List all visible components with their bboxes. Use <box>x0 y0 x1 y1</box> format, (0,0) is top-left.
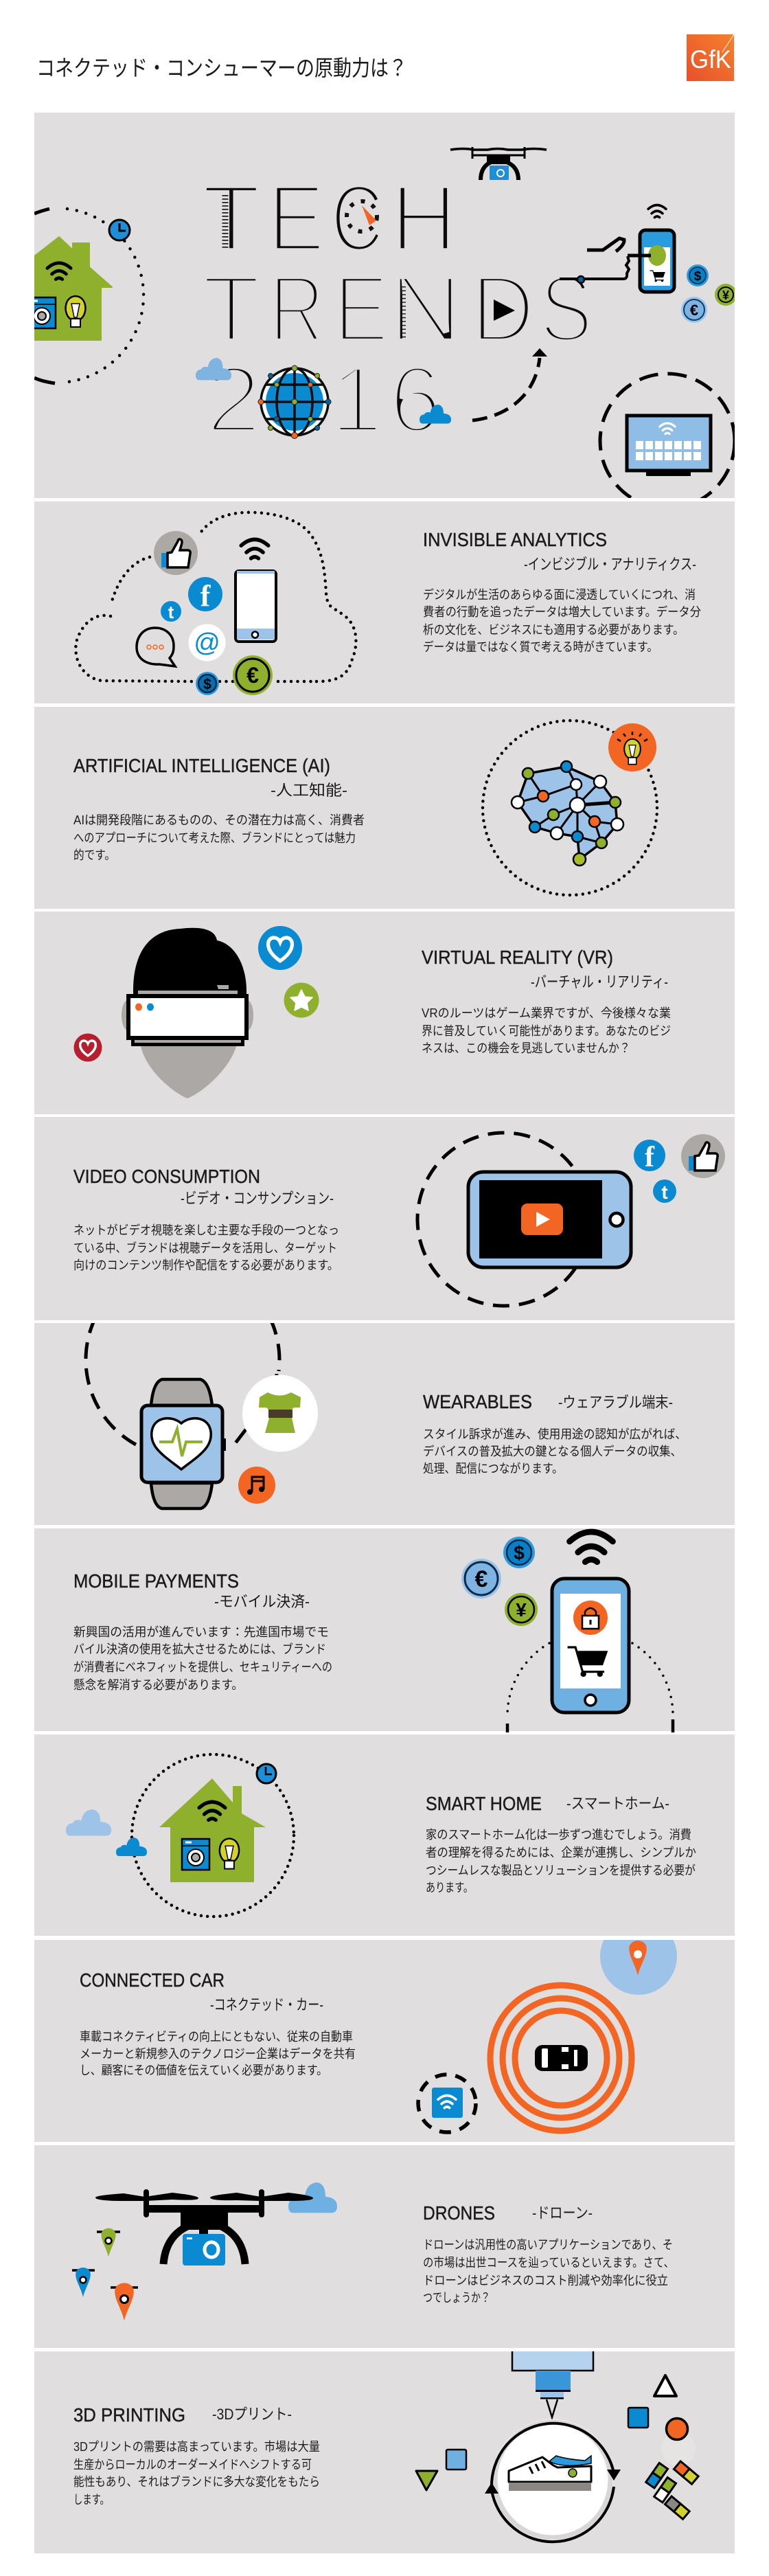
hero title: TECH TRENDS 2016: C <box>331 166 384 271</box>
icon: house <box>28 237 112 340</box>
icon: mini drone blue <box>72 2268 95 2297</box>
heading: VIRTUAL REALITY (VR) <box>422 947 613 968</box>
body text: メーカーと新規参入のテクノロジー企業はデータを共有 <box>80 2047 356 2061</box>
icon: tumblr: t <box>661 1182 668 1203</box>
icon: thumb <box>154 531 198 575</box>
icon: car <box>535 2045 588 2071</box>
icon: shoe <box>509 2456 591 2491</box>
subheading: -インビジブル・アナリティクス- <box>524 556 696 573</box>
icon: yen coin: ¥ <box>722 289 729 302</box>
icon: phone with video <box>468 1172 631 1267</box>
dotted circle left <box>34 209 144 383</box>
panel: hero <box>28 113 737 508</box>
icon: cloud light <box>66 1809 111 1835</box>
arrow: dashed <box>472 348 547 420</box>
logo: GfK: GfK <box>690 45 731 74</box>
icon: euro coin <box>681 297 707 323</box>
icon: clock <box>109 220 130 240</box>
body text: 3Dプリントの需要は高まっています。市場は大量 <box>73 2440 320 2454</box>
hero title: TECH TRENDS 2016: 2 <box>206 347 262 453</box>
icon: at sign: @ <box>194 629 220 657</box>
heading: WEARABLES <box>423 1391 532 1412</box>
panel: virtual reality <box>34 912 735 1114</box>
body text: 懸念を解消する必要があります。 <box>73 1678 243 1692</box>
hero title: TECH TRENDS 2016: D <box>471 256 535 362</box>
ruler on N <box>400 286 406 339</box>
icon: tumblr <box>161 601 181 622</box>
body text: スタイル訴求が進み、使用用途の認知が広がれば、 <box>423 1427 687 1441</box>
icon: house <box>159 1778 266 1882</box>
icon: euro: € <box>475 1566 488 1592</box>
panel: mobile payments <box>34 1528 735 1732</box>
icon: cloud <box>288 2182 337 2213</box>
logo: GfK <box>687 34 734 81</box>
icon: thumb <box>681 1134 725 1178</box>
icon: drone <box>95 2192 313 2266</box>
body text: ネスは、この機会を見逃していませんか？ <box>422 1041 630 1055</box>
panel: drones <box>34 2145 735 2348</box>
body text: 新興国の活用が進んでいます：先進国市場でモ <box>73 1625 329 1639</box>
icon: star <box>284 982 319 1018</box>
icon: phone with lock and cart <box>552 1579 629 1713</box>
body text <box>73 1625 332 1692</box>
icon: dollar coin <box>687 264 709 286</box>
panel: wearables <box>34 1323 735 1525</box>
icon: dollar: $ <box>203 677 211 692</box>
icon: compass <box>347 201 377 231</box>
body text <box>426 1828 696 1895</box>
body text <box>422 1006 671 1055</box>
body text: 析の文化を、ビジネスにも適用する必要があります。 <box>423 623 684 637</box>
icon: euro <box>233 655 273 695</box>
title: コネクテッド・コンシューマーの原動力は？ <box>36 56 407 80</box>
icon: speech bubble <box>137 628 175 666</box>
body text: 車載コネクティビティの向上にともない、従来の自動車 <box>80 2030 353 2044</box>
body text: デジタルが生活のあらゆる面に浸透していくにつれ、消 <box>423 588 696 602</box>
body text: データは量ではなく質で考える時がきています。 <box>423 640 658 654</box>
panel: artificial intelligence <box>34 707 735 909</box>
subheading: -スマートホーム- <box>566 1795 669 1812</box>
icon: facebook: f <box>645 1142 655 1173</box>
body text: 家のスマートホーム化は一歩ずつ進むでしょう。消費 <box>426 1828 691 1842</box>
subheading: -3Dプリント- <box>212 2406 292 2423</box>
icon: head with VR headset <box>122 928 253 1098</box>
icon: printer head <box>512 2351 593 2417</box>
hero title: TECH TRENDS 2016: T <box>202 256 261 362</box>
icon: dollar <box>196 672 219 695</box>
body text <box>73 1223 339 1272</box>
heading: ARTIFICIAL INTELLIGENCE (AI) <box>73 755 330 776</box>
hero title: TECH TRENDS 2016: E <box>334 256 389 362</box>
body text: ドローンは汎用性の高いアプリケーションであり、そ <box>423 2238 673 2252</box>
panel: connected car <box>34 1918 735 2142</box>
body text: ている中、ブランドは視聴データを活用し、ターゲット <box>73 1241 337 1255</box>
icon: globe <box>258 365 331 438</box>
heading: 3D PRINTING <box>73 2404 185 2426</box>
body text: 界に普及していく可能性があります。あなたのビジ <box>422 1024 671 1038</box>
panel: 3d printing <box>34 2351 735 2553</box>
body text: へのアプローチについて考えた際、ブランドにとっては魅力 <box>73 831 356 845</box>
subheading: -ドローン- <box>532 2204 593 2222</box>
panel: invisible analytics <box>34 501 735 703</box>
body text: の市場は出世コースを辿っているといえます。さて、 <box>423 2256 674 2270</box>
dashed circle right <box>600 374 735 508</box>
signal rings <box>490 1985 632 2131</box>
heading: CONNECTED CAR <box>80 1969 225 1991</box>
body text: つでしょうか？ <box>423 2291 490 2305</box>
icon: mini drone orange <box>111 2283 138 2320</box>
subheading: -モバイル決済- <box>214 1593 310 1610</box>
ruler on T <box>222 195 228 248</box>
icon: euro: € <box>246 663 259 688</box>
icon: smartwatch <box>141 1379 226 1509</box>
body text: 的です。 <box>73 848 115 862</box>
dashed circle <box>84 1323 282 1447</box>
hero title: TECH TRENDS 2016: 1 <box>330 347 383 453</box>
subheading: -ウェアラブル端末- <box>558 1394 673 1411</box>
icon: tumblr <box>653 1179 676 1203</box>
icon: play <box>494 300 515 321</box>
icon: dollar coin: $ <box>694 269 702 284</box>
icon: brain network <box>512 761 623 866</box>
icon: print circle <box>485 2419 621 2542</box>
icon: at sign <box>188 624 225 661</box>
icon: facebook <box>188 577 222 613</box>
icon: light bulb <box>608 723 656 771</box>
heading: INVISIBLE ANALYTICS <box>423 529 607 550</box>
body text <box>80 2030 356 2077</box>
hero title: TECH TRENDS 2016: H <box>391 166 457 271</box>
subheading: -ビデオ・コンサンプション- <box>181 1190 334 1207</box>
icon: dollar <box>503 1537 535 1568</box>
icon: clock <box>257 1764 276 1783</box>
hero title: TECH TRENDS 2016: 6 <box>389 347 442 453</box>
icon: euro coin: € <box>690 302 698 319</box>
icon: heart blue <box>258 926 302 970</box>
icon: location pin <box>600 1940 677 1995</box>
panel: video consumption <box>34 1117 735 1320</box>
body text: ドローンはビジネスのコスト削減や効率化に役立 <box>423 2274 668 2287</box>
dotted cloud outline <box>76 512 356 681</box>
icon: wifi tile <box>418 2075 476 2132</box>
icon: facebook <box>634 1140 665 1173</box>
icon: heart red <box>74 1033 102 1062</box>
body text: VRのルーツはゲーム業界ですが、今後様々な業 <box>422 1006 671 1020</box>
dashed circle <box>417 1133 590 1306</box>
icon: cloud light <box>196 358 231 380</box>
icon: yen coin <box>715 284 737 306</box>
panel: smart home <box>34 1735 735 1936</box>
icon: dollar: $ <box>514 1542 525 1563</box>
icon: cloud blue <box>116 1838 147 1856</box>
hero title: TECH TRENDS 2016: N <box>389 256 463 362</box>
hero title: TECH TRENDS 2016: T <box>202 166 261 271</box>
icon: yen <box>505 1593 538 1626</box>
body text: デバイスの普及拡大の鍵となる個人データの収集、 <box>423 1445 682 1458</box>
body text: バイル決済の使用を拡大させるためには、ブランド <box>73 1642 326 1656</box>
icon: cloud blue <box>420 405 451 424</box>
body text: 生産からローカルのオーダーメイドへシフトする可 <box>73 2458 312 2472</box>
body text <box>73 2440 320 2507</box>
body text <box>423 1427 687 1476</box>
icon: wifi <box>570 1532 612 1562</box>
body text: 向けのコンテンツ制作や配信をする必要があります。 <box>73 1258 338 1272</box>
heading: SMART HOME <box>426 1793 542 1814</box>
body text <box>423 2238 674 2305</box>
heading: DRONES <box>423 2202 495 2224</box>
body text: ネットがビデオ視聴を楽しむ主要な手段の一つとなっ <box>73 1223 339 1237</box>
icon: tv <box>627 416 711 476</box>
hero title: TECH TRENDS 2016: S <box>540 256 593 362</box>
icon: drone small <box>450 147 547 180</box>
shapes <box>416 2375 696 2490</box>
body text <box>73 813 365 862</box>
body text: し、顧客にその価値を伝えていく必要があります。 <box>80 2064 328 2077</box>
hero title: TECH TRENDS 2016 <box>202 166 593 453</box>
body text: します。 <box>73 2493 109 2507</box>
hero title: TECH TRENDS 2016: R <box>269 256 325 362</box>
icon: yen: ¥ <box>516 1599 527 1620</box>
icon: music <box>238 1467 275 1504</box>
icon: facebook: f <box>200 579 211 613</box>
icon: tumblr: t <box>168 602 174 622</box>
pills <box>646 2461 698 2519</box>
icon: euro <box>461 1559 501 1598</box>
body text: AIは開発段階にあるものの、その潜在力は高く、消費者 <box>73 813 365 827</box>
subheading: -コネクテッド・カー- <box>210 1996 323 2013</box>
body text <box>423 588 701 654</box>
body text: つシームレスな製品とソリューションを提供する必要が <box>426 1864 696 1877</box>
icon: phone <box>236 571 276 642</box>
dotted arcs <box>507 1643 673 1732</box>
dotted circle <box>132 1754 294 1917</box>
hero title: TECH TRENDS 2016: E <box>268 166 325 271</box>
body text: 能性もあり、それはブランドに多大な変化をもたら <box>73 2474 320 2489</box>
icon: dress <box>242 1375 318 1452</box>
body text: 費者の行動を追ったデータは増大しています。データ分 <box>423 605 701 619</box>
body text: 者の理解を得るためには、企業が連携し、シンプルか <box>426 1846 696 1860</box>
icon: mini drone green <box>97 2228 120 2257</box>
dotted circle <box>483 721 657 895</box>
subheading: -人工知能- <box>271 782 347 799</box>
icon: wifi <box>241 539 268 558</box>
icon: phone with hand <box>560 205 674 292</box>
body text: あります。 <box>426 1881 473 1895</box>
subheading: -バーチャル・リアリティ- <box>531 973 668 991</box>
heading: MOBILE PAYMENTS <box>73 1570 239 1592</box>
body text: 処理、配信につながります。 <box>423 1462 563 1476</box>
body text: が消費者にベネフィットを提供し、セキュリティーへの <box>73 1660 332 1674</box>
heading: VIDEO CONSUMPTION <box>73 1166 260 1187</box>
